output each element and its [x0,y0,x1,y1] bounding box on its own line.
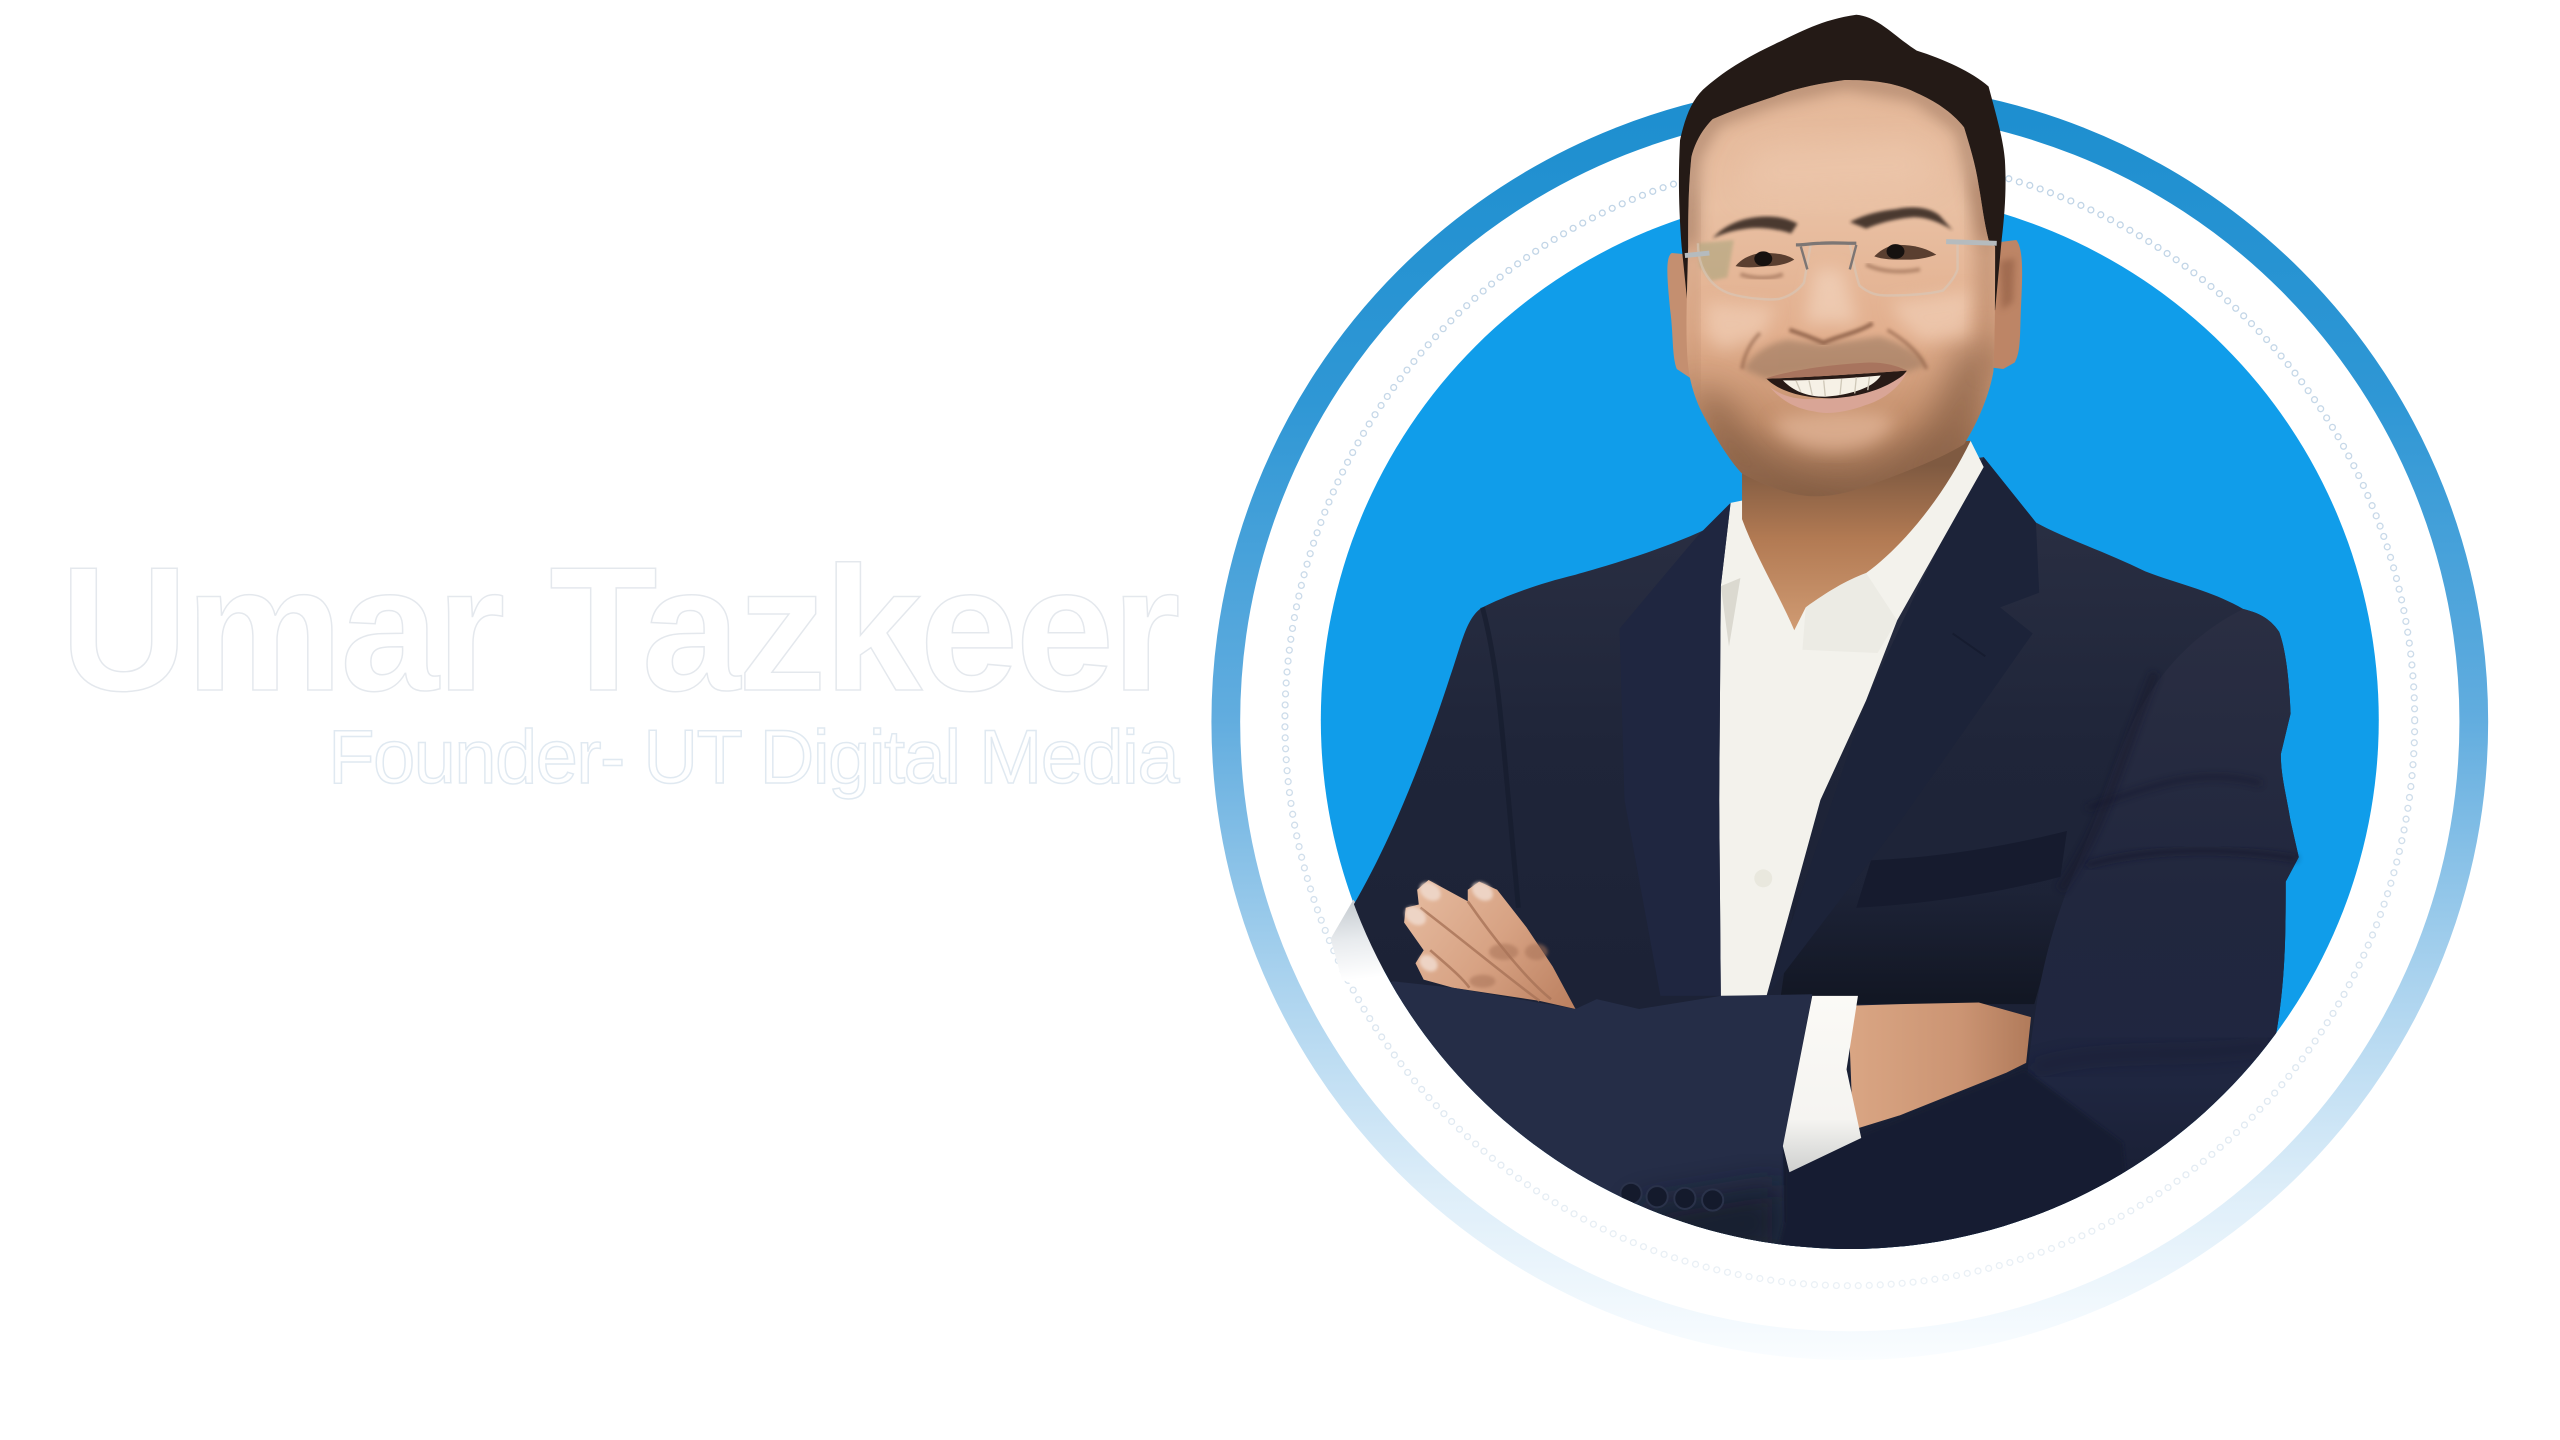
dark torso shadow [1781,938,2051,1004]
smile [1767,371,1907,398]
smile creases [1742,330,1927,369]
portrait graphic [1211,14,2488,1342]
shirt button [1754,869,1772,887]
nose highlight [1804,269,1858,323]
collar fold [1806,573,1897,622]
chin highlight [1771,412,1894,451]
eyes [1736,253,1794,267]
jaw stubble [1692,329,1994,496]
knuckles [1469,944,1548,988]
right sleeve [2026,609,2299,1219]
ears [1667,253,1691,379]
dotted ring [1285,156,2415,1286]
lower sleeve [1390,982,1812,1247]
glasses [1685,240,1997,299]
blue background circle [1321,191,2379,1249]
neck [1742,441,1971,630]
face [1687,80,1995,496]
eyebrows [1713,217,1798,238]
hair [1679,15,2006,310]
lens tint [1698,240,1734,281]
cheek highlights [1706,291,1972,351]
nose [1789,323,1873,343]
right lapel [1784,457,2039,973]
temple shadow [1972,180,1998,376]
fingernails [1401,878,1496,975]
hairline shadow [1688,80,1989,247]
hand [1401,878,1576,1009]
breast pocket [1860,832,2066,900]
sleeve buttons [1620,1183,1723,1211]
forearm [1848,1002,2031,1130]
head [1667,15,2022,519]
lower jacket hem [1778,1073,2126,1249]
person [1306,15,2299,1306]
shirt front [1719,441,1984,996]
left lapel [1632,503,1731,996]
shirt cuff [1783,996,1861,1172]
finger creases [1420,901,1551,1001]
outer gradient ring [1226,98,2474,1346]
moustache [1744,336,1925,379]
torso and jacket [1354,440,2302,1249]
forehead highlight [1831,157,1904,160]
role subtitle: Founder- UT Digital Media [328,715,1178,800]
faint shadow wedge by the elbow [1331,900,1388,999]
left arm seam [1480,607,1513,826]
under-eye shadows [1740,264,1920,278]
sleeve folds [2076,692,2302,868]
name heading: Umar Tazkeer [60,530,1178,728]
facial shading [1688,80,1998,519]
